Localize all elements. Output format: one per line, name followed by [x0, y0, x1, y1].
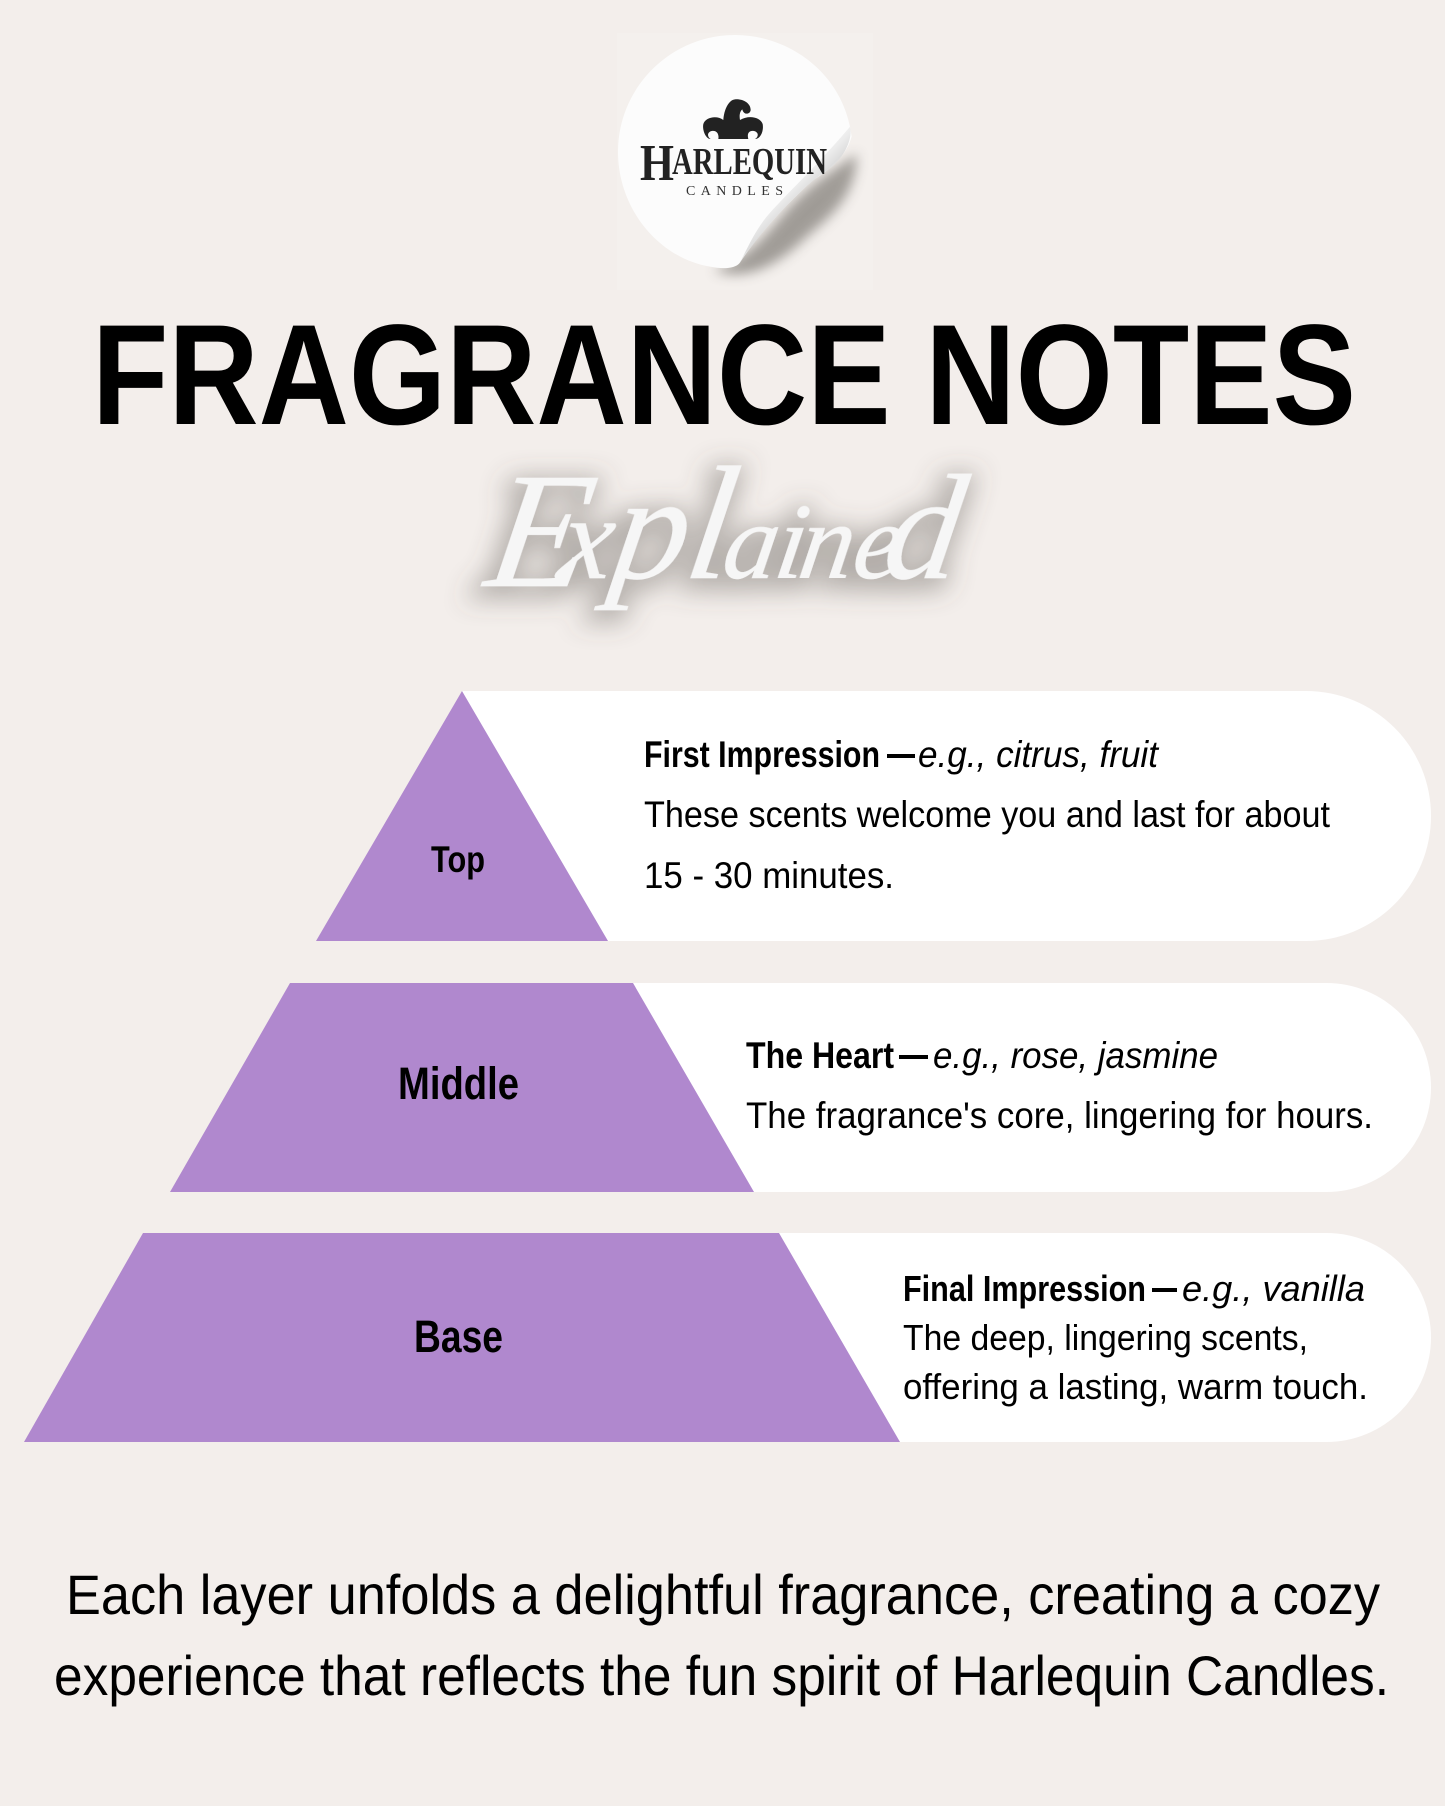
- logo wordmark: [640, 135, 827, 199]
- subtitle script: l: [676, 435, 750, 614]
- middle label: Middle: [398, 1058, 519, 1109]
- middle heading: The Heart: [746, 1035, 894, 1076]
- top description: 15 - 30 minutes.: [644, 855, 894, 896]
- subtitle script: a: [716, 482, 789, 602]
- top triangle: [316, 691, 608, 941]
- closing statement: [54, 1563, 1389, 1707]
- top pill: [462, 691, 1431, 941]
- base heading: [903, 1268, 1365, 1309]
- base trapezoid: [24, 1233, 900, 1442]
- subtitle script: [475, 435, 978, 622]
- subtitle script: p: [594, 445, 704, 611]
- sticker shadow: [713, 153, 857, 274]
- top label: Top: [431, 839, 485, 880]
- subtitle script: n: [792, 482, 865, 602]
- panel: middle note: [170, 983, 1431, 1192]
- top heading: [644, 734, 1160, 775]
- top heading: First Impression: [644, 734, 880, 775]
- base description: offering a lasting, warm touch.: [903, 1366, 1368, 1407]
- base description: [903, 1317, 1368, 1407]
- top heading: e.g., citrus, fruit: [918, 734, 1160, 775]
- closing statement: Each layer unfolds a delightful fragrance, creating a cozy: [66, 1563, 1380, 1626]
- top description: These scents welcome you and last for about: [644, 794, 1331, 835]
- middle trapezoid: [170, 983, 754, 1192]
- sticker curl: [739, 127, 851, 264]
- subtitle script: i: [768, 482, 817, 602]
- middle heading: e.g., rose, jasmine: [933, 1035, 1218, 1076]
- panel: base note: [24, 1233, 1431, 1442]
- base pill: [779, 1233, 1431, 1442]
- base description: The deep, lingering scents,: [903, 1317, 1308, 1358]
- subtitle script: e: [846, 482, 913, 602]
- subtitle script: d: [875, 445, 977, 611]
- logo sticker: [618, 35, 857, 274]
- jester hat icon: [703, 99, 763, 139]
- sticker body: [618, 35, 852, 268]
- middle pill: [633, 983, 1431, 1192]
- logo wordmark: H: [640, 135, 674, 192]
- middle description: The fragrance's core, lingering for hours.: [746, 1095, 1373, 1136]
- top description: [644, 794, 1331, 896]
- panel: top note: [316, 691, 1431, 941]
- middle heading: [746, 1035, 1218, 1076]
- base heading: Final Impression: [903, 1268, 1146, 1309]
- logo wordmark: CANDLES: [686, 184, 783, 199]
- base heading: e.g., vanilla: [1182, 1268, 1365, 1309]
- subtitle script: x: [550, 473, 625, 604]
- base label: Base: [414, 1311, 503, 1362]
- logo wordmark: ARLEQUIN: [672, 141, 827, 183]
- subtitle script: E: [475, 439, 607, 622]
